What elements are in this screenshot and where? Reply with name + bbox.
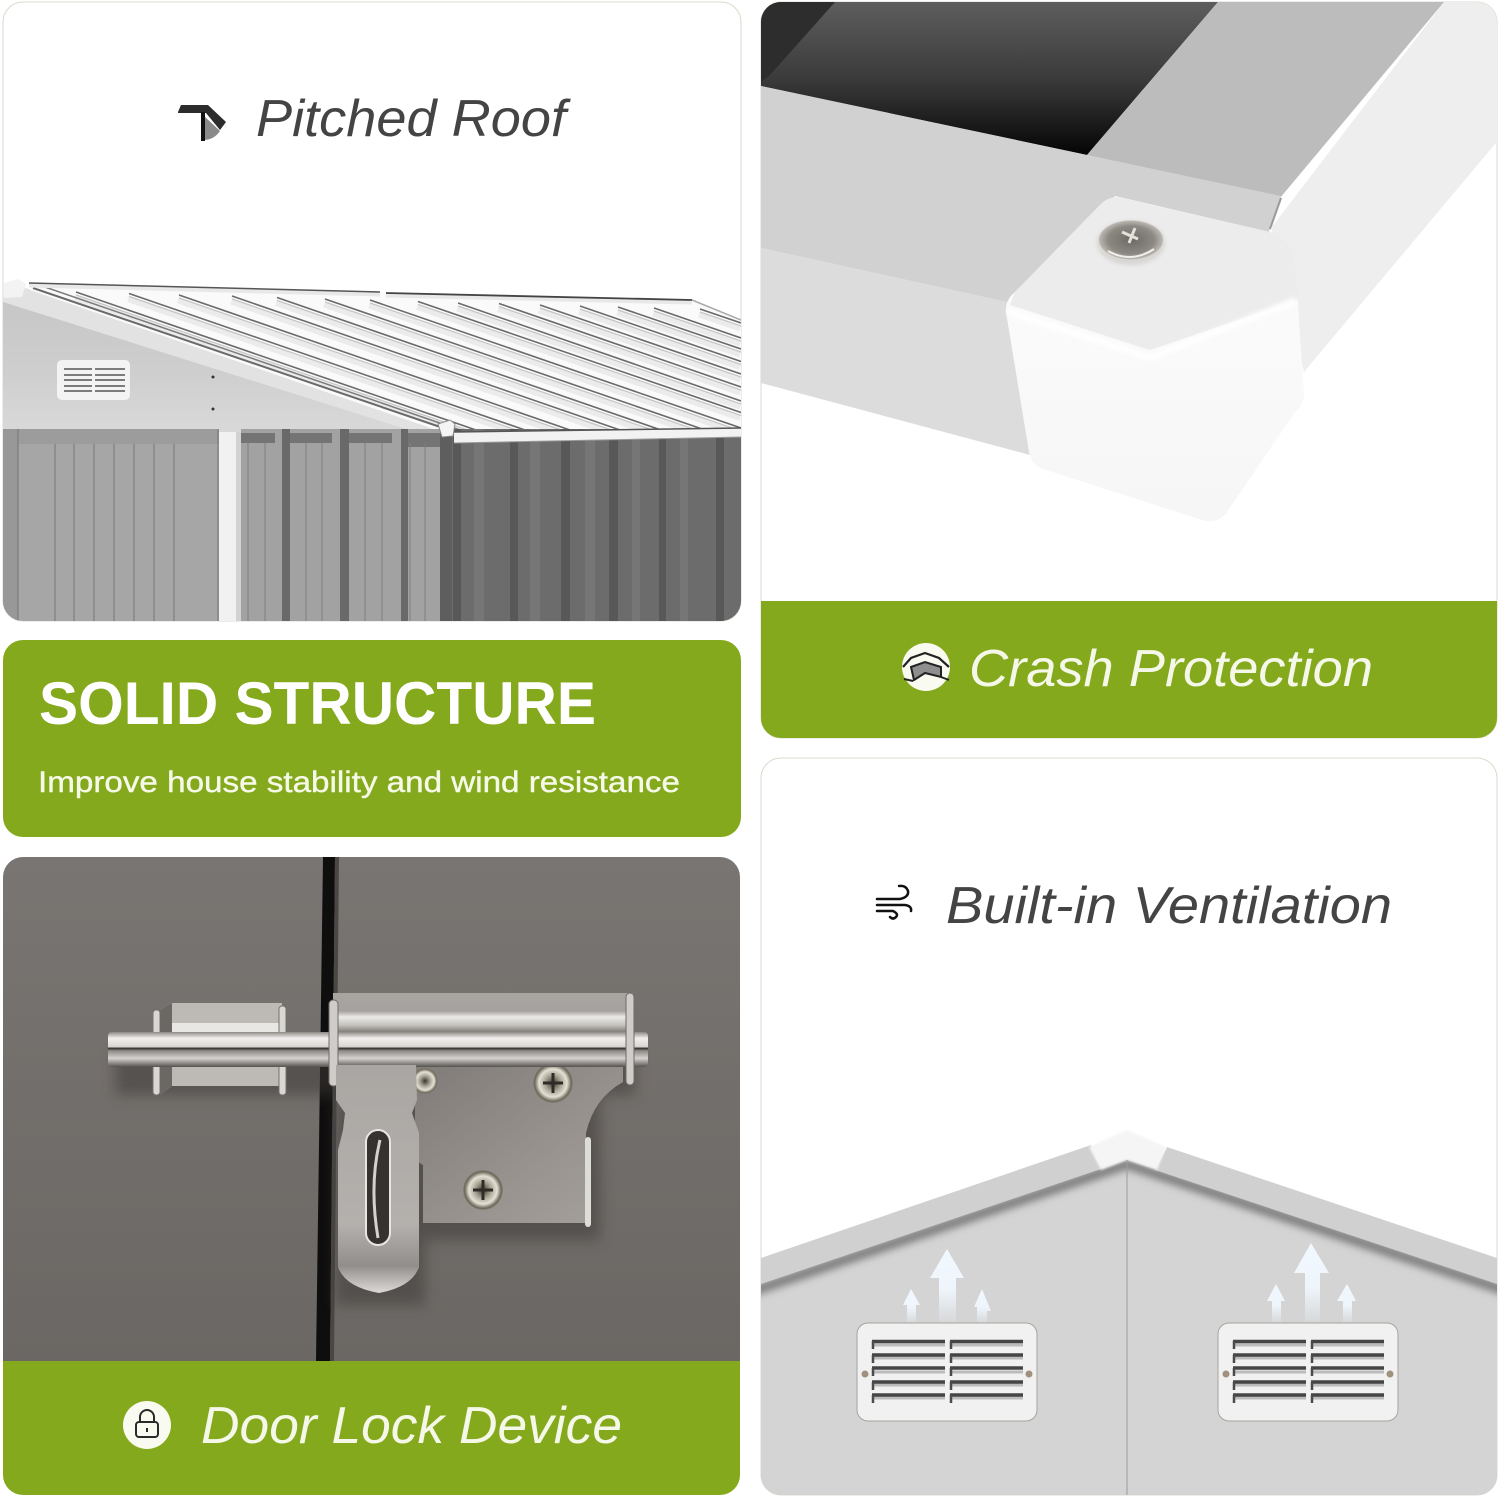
right vent bbox=[1218, 1323, 1398, 1421]
gable wall bbox=[3, 302, 406, 432]
panel: built-in ventilation bbox=[750, 758, 1500, 1495]
screw bbox=[1097, 220, 1165, 265]
plate right flange bbox=[585, 1137, 591, 1227]
eave trim bbox=[454, 428, 741, 443]
dark opening bbox=[761, 2, 1218, 155]
barge trim bbox=[3, 288, 452, 431]
ridge lip bbox=[29, 283, 741, 320]
roof band right bbox=[1155, 1147, 1500, 1285]
inner frame bbox=[1087, 2, 1444, 198]
heading: Door Lock Device: Door Lock Device bbox=[201, 1397, 622, 1455]
icon: crash protection bbox=[902, 643, 950, 691]
heading: solid structure: SOLID STRUCTURE bbox=[39, 670, 596, 737]
right frame bbox=[1271, 2, 1500, 372]
frame top face bbox=[761, 86, 1281, 303]
gable illustration bbox=[750, 1130, 1500, 1495]
left keeper bbox=[153, 1003, 286, 1095]
crash label band bbox=[761, 601, 1497, 738]
panel: pitched roof bbox=[3, 2, 742, 624]
icon: padlock bbox=[123, 1401, 171, 1449]
panel: door lock device bbox=[3, 857, 740, 1495]
shed roof photo illustration bbox=[3, 279, 742, 624]
dark side wall bbox=[440, 429, 742, 624]
door gap bbox=[316, 857, 335, 1361]
barrel rings bbox=[329, 993, 634, 1086]
panel: crash protection bbox=[761, 2, 1500, 738]
walls bbox=[3, 429, 219, 624]
roof shadow bbox=[750, 1164, 1500, 1292]
right vent arrows bbox=[1267, 1243, 1356, 1323]
subheading: Improve house stability and wind resistance bbox=[38, 766, 680, 799]
frame front face bbox=[761, 248, 1030, 455]
middle wall bbox=[241, 429, 441, 624]
eave corner cap bbox=[438, 420, 455, 437]
lock label band bbox=[3, 1361, 740, 1495]
left vent bbox=[857, 1323, 1037, 1421]
gable wall bbox=[761, 1160, 1497, 1495]
center seam bbox=[1126, 1160, 1128, 1495]
hasp slot bbox=[366, 1130, 390, 1245]
roof surface bbox=[29, 283, 741, 436]
icon: wind bbox=[877, 886, 911, 918]
roof band left bbox=[761, 1145, 1101, 1284]
heading: Built-in Ventilation: Built-in Ventilation bbox=[946, 877, 1392, 935]
sliding rod bbox=[108, 1032, 648, 1067]
barrel bbox=[333, 993, 633, 1033]
plate screws bbox=[412, 1063, 573, 1210]
roof seams bbox=[33, 286, 741, 436]
hasp bbox=[336, 1065, 419, 1293]
rivets bbox=[212, 376, 214, 410]
gable vent bbox=[57, 360, 130, 400]
heading: Pitched Roof: Pitched Roof bbox=[256, 90, 571, 148]
panel: solid structure banner bbox=[3, 640, 741, 837]
plate bbox=[415, 1065, 623, 1223]
frame end edge bbox=[1270, 198, 1281, 229]
heading: Crash Protection: Crash Protection bbox=[969, 640, 1373, 698]
white post bbox=[219, 432, 236, 621]
lock shadow bbox=[115, 1050, 635, 1305]
left vent arrows bbox=[903, 1249, 991, 1323]
corner cap bbox=[1006, 197, 1304, 521]
ridge cap bbox=[1089, 1130, 1166, 1170]
icon: pitched roof bbox=[178, 105, 226, 141]
corner cap bbox=[4, 279, 26, 298]
